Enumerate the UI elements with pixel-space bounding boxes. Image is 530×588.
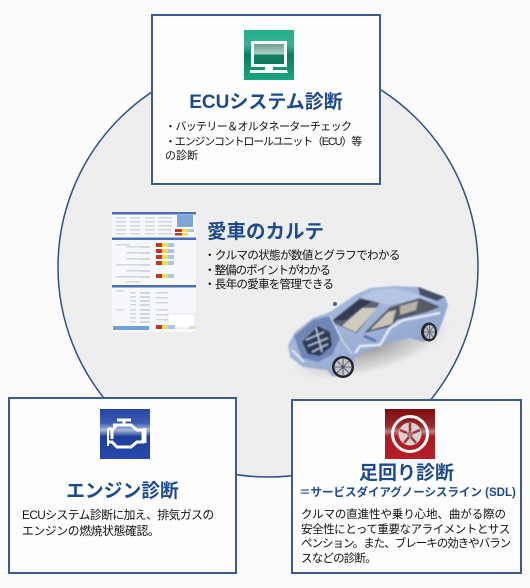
report sheet thumbnail bbox=[112, 212, 196, 332]
front wheel bbox=[332, 356, 354, 378]
heading: suspension diagnosis: 足回り診断 bbox=[359, 463, 454, 484]
heading: engine diagnosis: エンジン診断 bbox=[66, 480, 179, 501]
side windows bbox=[364, 298, 440, 333]
text block: car chart benefits bbox=[204, 249, 400, 291]
rear wheel bbox=[421, 322, 437, 342]
roof bbox=[360, 288, 437, 305]
text block: suspension details: 安全性にとって重要なアライメントとサス bbox=[301, 524, 510, 536]
subheading: service diagnosis line: ＝サービスダイアグノーシスライン (SDL) bbox=[299, 487, 516, 499]
icon: engine bbox=[100, 409, 150, 459]
text block: car chart benefits: ・整備のポイントがわかる bbox=[204, 264, 330, 276]
text block: ECU details: ・エンジンコントロールユニット（ECU）等 bbox=[165, 136, 361, 148]
text block: engine details bbox=[22, 508, 214, 538]
heading: ECU system diagnosis: ECUシステム診断 bbox=[189, 92, 343, 113]
panel: ECU system diagnosis bbox=[151, 14, 381, 185]
text block: suspension details: ペンション。また、ブレーキの効きやバラン bbox=[301, 538, 510, 550]
engine bay bbox=[294, 316, 340, 362]
text block: suspension details: スなどの診断。 bbox=[301, 552, 376, 564]
text block: car chart benefits: ・クルマの状態が数値とグラフでわかる bbox=[204, 249, 400, 262]
illustration: transparent car bbox=[288, 285, 449, 378]
windshield bbox=[330, 298, 380, 333]
text block: engine details: エンジンの燃焼状態確認。 bbox=[22, 524, 159, 538]
icon: wheel bbox=[385, 409, 435, 459]
text block: ECU details bbox=[165, 121, 362, 162]
text block: suspension details: クルマの直進性や乗り心地、曲がる際の bbox=[301, 509, 506, 521]
icon: monitor bbox=[244, 30, 294, 80]
body bbox=[288, 286, 448, 377]
text block: car chart benefits: ・長年の愛車を管理できる bbox=[204, 278, 333, 291]
text block: ECU details: の診断 bbox=[165, 150, 198, 162]
panel: suspension diagnosis bbox=[291, 399, 522, 574]
text block: ECU details: ・バッテリー＆オルタネーターチェック bbox=[165, 121, 351, 133]
text block: engine details: ECUシステム診断に加え、排気ガスの bbox=[22, 508, 214, 522]
heading: car chart: 愛車のカルテ bbox=[207, 221, 324, 243]
panel: engine diagnosis bbox=[8, 397, 237, 574]
text block: suspension details bbox=[301, 508, 510, 564]
mirror bbox=[333, 302, 337, 306]
exhaust pipe bbox=[355, 313, 440, 353]
